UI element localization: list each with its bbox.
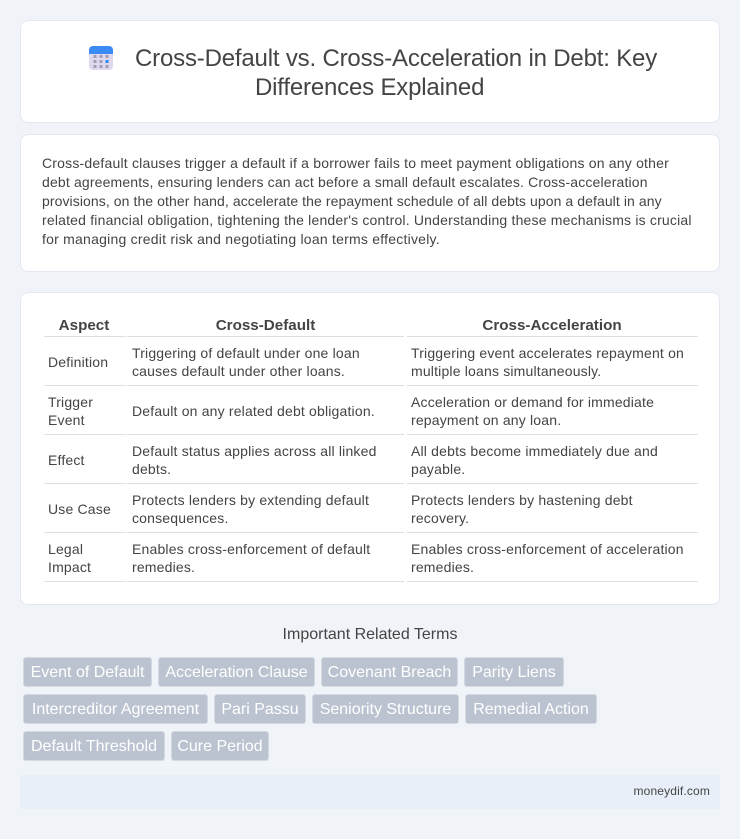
panel: comparison table: Triggering event accelerates repayment on — [411, 345, 684, 361]
panel: comparison table — [20, 292, 720, 605]
panel: comparison table: multiple loans simultaneously. — [411, 363, 601, 379]
text block: intro: related financial obligation, tightening the lender's control. Understanding these mechanisms is crucial — [42, 212, 692, 228]
panel: comparison table: Protects lenders by extending default — [132, 492, 369, 508]
panel: comparison table: All debts become immediately due and — [411, 443, 658, 459]
panel: comparison table: Protects lenders by hastening debt — [411, 492, 633, 508]
row: definition: Definition — [48, 354, 108, 370]
panel: comparison table: Default on any related debt obligation. — [132, 403, 375, 419]
tag list: related terms: Default Threshold — [31, 738, 157, 755]
tag list: related terms: Parity Liens — [472, 664, 556, 681]
text block: intro: Cross-default clauses trigger a default if a borrower fails to meet payment obligations on any other — [42, 155, 669, 171]
panel: comparison table: remedies. — [411, 559, 474, 575]
icon: calendar — [89, 46, 113, 70]
panel: comparison table: Acceleration or demand for immediate — [411, 394, 654, 410]
row: trigger event: Trigger — [48, 394, 93, 410]
text block: intro — [42, 155, 692, 247]
panel: comparison table: debts. — [132, 461, 171, 477]
tag list: related terms: Cure Period — [177, 738, 263, 755]
row: use case: Use Case — [48, 501, 111, 517]
panel: comparison table: remedies. — [132, 559, 195, 575]
footer bar — [20, 775, 720, 809]
title — [135, 45, 658, 101]
panel: comparison table: causes default under other loans. — [132, 363, 345, 379]
row: trigger event — [48, 394, 93, 428]
title: Cross-Default vs. Cross-Acceleration in Debt: Key — [135, 45, 657, 72]
tag list: related terms — [23, 657, 597, 761]
row: effect: Effect — [48, 452, 85, 468]
panel: comparison table: Cross-Default — [216, 317, 315, 334]
panel: comparison table: payable. — [411, 461, 465, 477]
panel: intro text — [20, 134, 720, 272]
tag list: related terms: Seniority Structure — [320, 701, 451, 718]
tag list: related terms: Event of Default — [31, 664, 144, 681]
tag list: related terms: Remedial Action — [473, 701, 589, 718]
panel: comparison table: Triggering of default under one loan — [132, 345, 360, 361]
row: legal impact: Impact — [48, 559, 91, 575]
tag list: related terms: Acceleration Clause — [165, 664, 308, 681]
panel: comparison table: Enables cross-enforcement of default — [132, 541, 370, 557]
panel: comparison table: consequences. — [132, 510, 229, 526]
title: Differences Explained — [255, 74, 484, 101]
tag list: related terms: Intercreditor Agreement — [32, 701, 199, 718]
panel: comparison table: repayment on any loan. — [411, 412, 561, 428]
footer credit: moneydif.com — [634, 784, 710, 798]
tag list: related terms: Covenant Breach — [328, 664, 451, 681]
panel: header — [20, 20, 720, 123]
text block: intro: provisions, on the other hand, accelerate the repayment schedule of all debts upon a default in any — [42, 193, 662, 209]
text block: intro: for managing credit risk and negotiating loan terms effectively. — [42, 231, 440, 247]
row: legal impact — [48, 541, 91, 575]
heading: related terms: Important Related Terms — [283, 626, 457, 643]
row: legal impact: Legal — [48, 541, 83, 557]
tag list: related terms: Pari Passu — [221, 701, 299, 718]
panel: comparison table: recovery. — [411, 510, 469, 526]
text block: intro: debt agreements, ensuring lenders can act before a small default escalates. Cross-acceleration — [42, 174, 648, 190]
panel: comparison table: Cross-Acceleration — [482, 317, 622, 334]
row: trigger event: Event — [48, 412, 85, 428]
panel: comparison table: Enables cross-enforcement of acceleration — [411, 541, 684, 557]
table header: Aspect — [59, 317, 109, 334]
panel: comparison table: Default status applies across all linked — [132, 443, 377, 459]
